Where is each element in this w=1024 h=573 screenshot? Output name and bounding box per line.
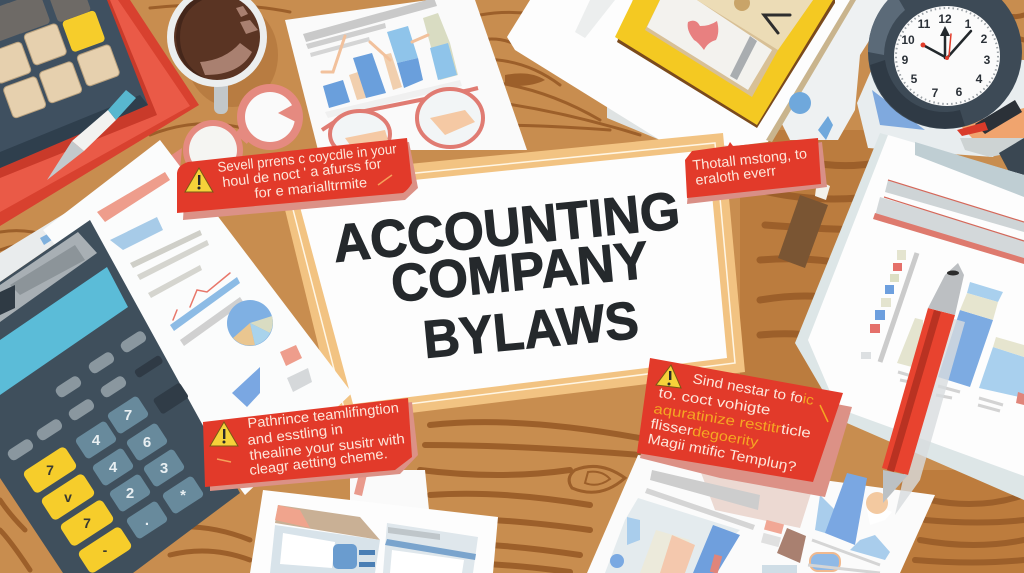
calculator yellow keys [22,445,133,573]
callout text [217,140,398,201]
red folder under top calculator [0,0,199,226]
calculator number keys: 7 [124,407,132,424]
central title board [277,133,745,422]
main calculator [0,220,240,573]
calculator yellow keys: 7 [83,515,91,531]
callout text: Thotall mstong, to [692,145,808,173]
clock stand [857,50,1024,157]
calculator number keys [74,395,205,540]
left report document [0,140,352,495]
bottom centre documents [250,470,498,573]
bottom right document [587,455,935,573]
icon: warning triangle [656,365,681,388]
warning callout: top left [177,138,418,220]
clock numerals: 5 [911,72,918,86]
red reading glasses [322,88,483,157]
clock hands [920,26,971,60]
calculator number keys: 4 [109,459,118,476]
mini thumbnails [710,520,880,573]
callout text [246,399,405,478]
dark check mark [764,15,790,33]
callout text: for e marialltrmite [254,174,368,201]
icon: warning triangle [185,168,213,192]
alarm clock [868,0,1022,136]
callout text: thealine your susitr with [249,430,405,463]
calculator number keys: 4 [92,432,101,449]
pink glasses with pie lens [167,84,303,180]
dark device at right edge [999,138,1024,200]
pencil [882,263,965,515]
calculator yellow keys: 7 [46,462,54,478]
callout text: houl de noct ' a afurss for [221,155,383,190]
calculator number keys: . [145,512,149,529]
title [330,181,683,370]
blue block and orange emblem [815,473,892,560]
bar chart [897,282,1024,411]
clock numerals: 6 [956,85,963,99]
pink bird illustration [688,21,718,50]
callout text: and esstling in [246,420,344,448]
calculator small function keys [6,329,189,462]
clock numerals: 1 [965,17,972,31]
callout text: Sevell prrens c coycdle in your [217,140,398,175]
clock numerals: 2 [981,32,988,46]
coffee cup [167,0,278,114]
pie chart [227,300,273,346]
calculator number keys: 3 [160,460,168,477]
callout text: cleagr aetting cheme. [248,445,388,478]
calculator number keys: 2 [126,485,134,502]
calculator number keys: 6 [143,434,151,451]
callout text [646,370,828,475]
callout text: eraloth everr [694,162,777,188]
warning callout: top right [685,138,827,204]
calculator yellow and grey keys [0,0,106,53]
pen [47,90,136,180]
top calculator [0,0,148,168]
bar chart [322,13,462,118]
clock numerals [901,12,991,100]
silver top panel [0,232,97,322]
yellow notebook [615,0,835,128]
callout text: to. coct vohigte [658,384,772,418]
area chart [232,367,260,407]
callout text [692,145,808,188]
callout text: Pathrince teamlifingtion [247,399,399,431]
callout text: Sind nestar to fo ic [691,370,815,408]
calculator beige keys [0,23,120,119]
right large report [795,133,1024,500]
clock numerals: 12 [938,12,952,26]
legend column [861,250,917,362]
clock numerals: 11 [918,17,931,31]
calculator yellow keys: v [64,489,72,505]
callout text: aquratinize restitr ticle [653,400,812,441]
callout text: Magii mtific Templuŋ? [646,430,798,475]
top chart document [285,0,527,150]
icon: warning triangle [210,422,238,446]
title: BYLAWS [421,291,641,370]
calculator yellow keys: - [103,542,108,558]
clock numerals: 10 [901,33,915,47]
top white stack of papers [507,0,895,150]
title: ACCOUNTING [330,181,683,274]
calculator number keys: * [180,487,186,504]
clock numerals: 9 [902,53,909,67]
clock numerals: 4 [976,72,983,86]
peach block and grey lines [280,345,312,392]
clock numerals: 7 [932,86,939,100]
brown brush [778,180,830,268]
calculator screen [0,267,128,395]
callout text: flisserdegoerity [649,415,760,450]
title: COMPANY [389,231,651,314]
warning callout: bottom left [203,398,418,491]
warning callout: bottom right [637,358,852,497]
clock numerals: 3 [984,53,991,67]
